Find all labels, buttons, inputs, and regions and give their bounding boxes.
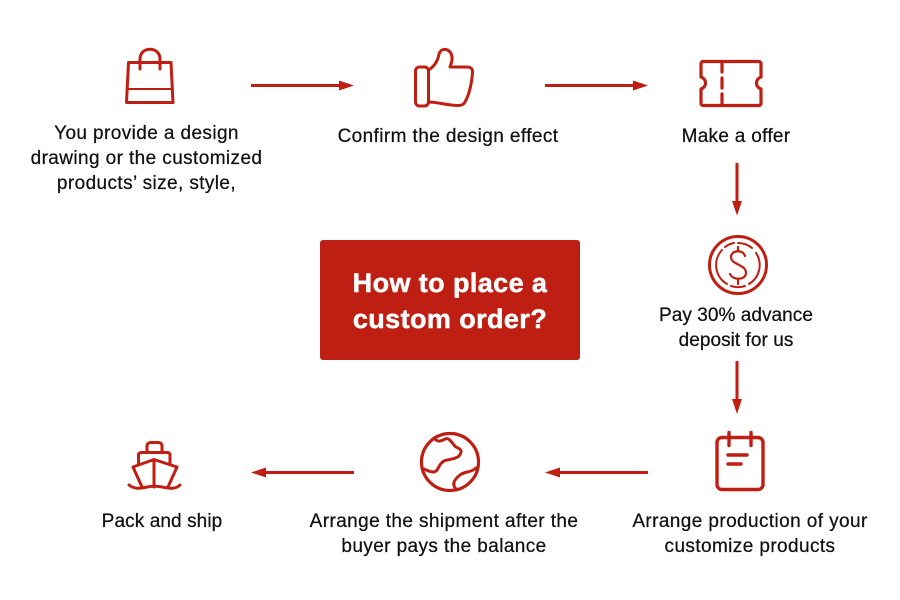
icon: ticket <box>701 62 761 106</box>
arrow: step 4 to 5 <box>732 361 742 414</box>
icon: notebook <box>717 432 763 490</box>
arrow: step 5 to 6 <box>545 468 648 478</box>
text: step 4 <box>659 305 813 351</box>
text: step 5: customize products <box>665 536 835 557</box>
text: step 4: Pay 30% advance <box>659 305 813 326</box>
text: step 1: products’ size, style, <box>57 173 236 194</box>
text: step 5 <box>632 511 868 557</box>
arrow: step 2 to 3 <box>545 80 648 90</box>
title box: How to place a <box>353 268 547 298</box>
title box: custom order? <box>353 304 547 334</box>
arrow: step 1 to 2 <box>251 80 354 90</box>
icon: shopping bag <box>126 49 173 102</box>
text: step 6 <box>310 511 578 557</box>
text: step 4: deposit for us <box>679 330 793 351</box>
icon: thumbs up <box>416 49 473 106</box>
icon: dollar coin <box>710 236 766 294</box>
text: step 7: Pack and ship <box>102 511 222 532</box>
arrow: step 3 to 4 <box>732 163 742 216</box>
title box <box>320 240 580 360</box>
text: step 1 <box>31 123 262 194</box>
text: step 2: Confirm the design effect <box>338 126 558 147</box>
text: step 3: Make a offer <box>682 126 790 147</box>
text: step 6: buyer pays the balance <box>341 536 547 557</box>
text: step 5: Arrange production of your <box>632 511 868 532</box>
text: step 6: Arrange the shipment after the <box>310 511 578 532</box>
text: step 1: drawing or the customized <box>31 148 262 169</box>
icon: globe <box>422 434 478 490</box>
icon: ship <box>129 442 180 488</box>
text: step 1: You provide a design <box>54 123 239 144</box>
arrow: step 6 to 7 <box>251 468 354 478</box>
